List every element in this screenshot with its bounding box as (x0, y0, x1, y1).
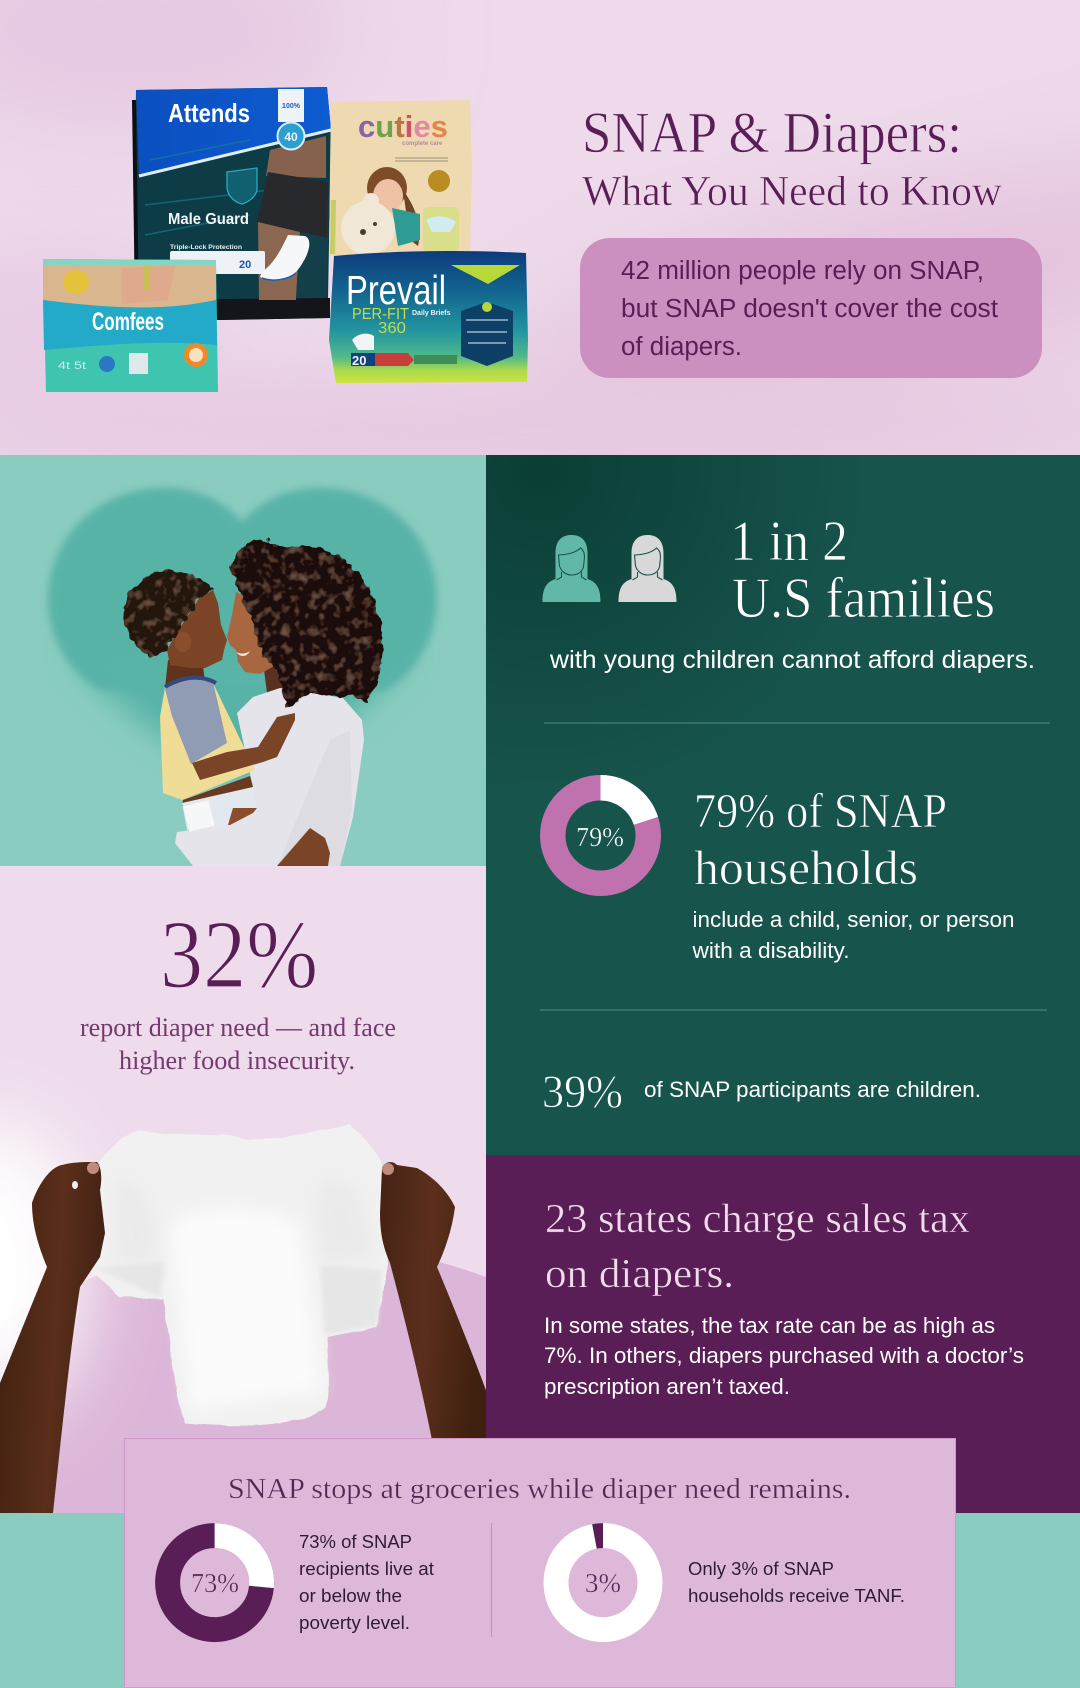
panel: header background (0, 0, 1080, 490)
text: 73% of SNAP recipients: or below the (299, 1585, 402, 1606)
product: Attends Male Guard package: Attends (168, 98, 250, 128)
text: report diaper need: higher food insecurity. (119, 1045, 355, 1075)
product: Attends Male Guard package: Triple-Lock Protection (170, 244, 242, 251)
photo: hands holding diaper (0, 1124, 487, 1513)
title: SNAP & Diapers: SNAP & Diapers: (582, 100, 962, 165)
product: Attends Male Guard package: MAXIMUM (175, 261, 210, 268)
product: Attends Male Guard package: 20 (239, 259, 251, 271)
product: Prevail Per-Fit package: Daily Briefs (412, 310, 451, 317)
text: Only 3% of SNAP: Only 3% of SNAP (688, 1558, 834, 1579)
text: report diaper need (80, 1012, 396, 1075)
shape: white glow (0, 1120, 85, 1420)
icon: grey woman (618, 535, 676, 602)
stat: 39%: 39% (542, 1066, 623, 1118)
product: Comfees package: Comfees (92, 308, 164, 336)
title: SNAP & Diapers (582, 100, 1003, 215)
stat: 1 in 2 U.S families (730, 510, 995, 630)
text: 73% of SNAP recipients: poverty level. (299, 1612, 410, 1633)
panel: bottom teal band right (955, 1513, 1080, 1688)
stat: 79% of SNAP households: households (694, 840, 918, 895)
stat: 79% of SNAP households (694, 783, 947, 895)
product: Cuties package: cuties (358, 109, 448, 144)
text: include a child: with a disability. (691, 938, 850, 963)
chart: 73% donut: 73% (191, 1568, 239, 1598)
product: Prevail Per-Fit package: PER-FIT (352, 306, 409, 323)
panel: 32% diaper need (0, 866, 486, 1513)
chart: 3% donut (548, 1528, 658, 1637)
photo: right hand and arm (380, 1162, 487, 1440)
callout: 42 million people: but SNAP doesn't cover the cost (621, 295, 998, 323)
photo: mother (175, 540, 383, 866)
product: Cuties package (329, 100, 472, 256)
callout: 42 million people (580, 238, 1042, 378)
text: report diaper need: report diaper need — and face (80, 1012, 396, 1042)
text: tax details: 7%. In others, diapers purchased with a doctor’s (544, 1343, 1024, 1368)
photo: child (122, 570, 330, 866)
panel: groceries card (124, 1438, 956, 1688)
stat: 1 in 2 U.S families: U.S families (732, 567, 995, 630)
product: Attends Male Guard package (134, 87, 331, 320)
shape: pink hill (0, 1242, 486, 1513)
stat: 1 in 2 U.S families: 1 in 2 (730, 510, 848, 573)
photo: diaper (90, 1124, 388, 1426)
text: include a child (691, 907, 1014, 963)
product: Prevail Per-Fit package: 360 (378, 320, 406, 337)
callout: 42 million people: 42 million people rely on SNAP, (621, 257, 984, 285)
title: SNAP & Diapers: What You Need to Know (582, 169, 1003, 215)
product: Comfees package (43, 259, 218, 392)
chart: 79% donut: 79% (576, 822, 624, 852)
product: Attends Male Guard package: 100% (282, 103, 301, 110)
panel: product photo group (43, 87, 528, 392)
product: Cuties package: complete care (402, 141, 443, 147)
icon: teal woman (542, 535, 600, 602)
panel: mother and child photo on teal (0, 455, 486, 866)
photo: left hand and arm (0, 1162, 105, 1513)
icon: heart shape (48, 488, 437, 785)
stat: 32%: 32% (160, 901, 318, 1008)
text: with young children: with young children cannot afford diapers. (549, 646, 1035, 674)
text: of SNAP participants: of SNAP participants are children. (644, 1077, 981, 1102)
panel: bottom teal band left (0, 1513, 124, 1688)
panel: dark green statistics (486, 455, 1080, 1155)
panel: purple sales tax (486, 1155, 1080, 1513)
text: Only 3% of SNAP (688, 1558, 905, 1606)
text: Only 3% of SNAP: households receive TANF. (688, 1585, 905, 1606)
heading: 23 states: 23 states charge sales tax (545, 1195, 970, 1241)
text: 73% of SNAP recipients: 73% of SNAP (299, 1531, 412, 1552)
chart: 3% donut: 3% (585, 1568, 621, 1598)
callout: 42 million people: of diapers. (621, 333, 742, 361)
heading: 23 states: on diapers. (545, 1250, 734, 1296)
heading: SNAP stops at groceries: SNAP stops at groceries while diaper need remains. (228, 1473, 851, 1505)
text: include a child: include a child, senior, or person (692, 907, 1014, 932)
text: tax details: In some states, the tax rate can be as high as (544, 1313, 995, 1338)
chart: 73% donut (168, 1536, 262, 1630)
text: 73% of SNAP recipients: recipients live at (299, 1558, 434, 1579)
text: tax details: prescription aren’t taxed. (544, 1374, 790, 1399)
product: Attends Male Guard package: Male Guard (168, 211, 249, 228)
chart: 79% donut (553, 788, 648, 883)
text: 73% of SNAP recipients (299, 1531, 434, 1633)
product: Prevail Per-Fit package: 20 (352, 353, 366, 368)
product: Prevail Per-Fit package (329, 251, 528, 383)
text: tax details (544, 1313, 1024, 1399)
product: Comfees package: 4t 5t (58, 360, 86, 372)
heading: 23 states (545, 1195, 970, 1296)
stat: 79% of SNAP households: 79% of SNAP (694, 783, 947, 838)
product: Prevail Per-Fit package: Prevail (346, 267, 446, 313)
product: Attends Male Guard package: 40 (284, 130, 298, 144)
